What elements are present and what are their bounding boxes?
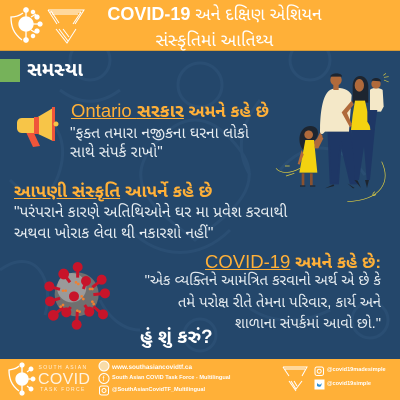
text: culture quote: "પરંપરાને કારણે અતિથિઓને ઘર મા પ્રવેશ કરવાથી <box>14 204 287 221</box>
footer logo <box>8 362 36 396</box>
icon: megaphone <box>17 107 58 147</box>
text: culture quote: અથવા ખોરાક લેવા થી નકારશો નહીં" <box>14 225 213 242</box>
heading: COVID-19: COVID-19 અમને કહે છે: <box>205 251 381 272</box>
footer triangle logo <box>282 366 308 392</box>
footer <box>0 359 400 400</box>
text: COVID quote: તમે પરોક્ષ રીતે તેમના પરિવાર, કાર્ય અને <box>178 294 381 310</box>
question: હું શું કરું? <box>140 327 213 348</box>
header banner <box>0 0 400 51</box>
text: COVID quote: "એક વ્યક્તિને આમંત્રિત કરવાનો અર્થ એ છે કે <box>145 273 381 289</box>
icon: coronavirus <box>44 262 110 330</box>
footer link icons: f <box>102 376 104 383</box>
man <box>328 128 357 183</box>
link: instagram: @SouthAsianCovidTF_Multilingual <box>112 387 205 393</box>
heading: Ontario: Ontario સરકાર અમને કહે છે <box>71 100 269 121</box>
text: Ontario quote: "ફક્ત તમારા નજીકના ઘરના લોકો <box>70 125 249 142</box>
text: Ontario quote: સાથે સંપર્ક રાખો" <box>70 144 163 161</box>
title: COVID-19 અને દક્ષિણ એશિયન <box>107 4 322 24</box>
family illustration <box>276 73 389 202</box>
footer organisation name: SOUTH ASIAN TASK FORCE <box>38 365 88 393</box>
text: COVID quote: શાળાના સંપર્કમાં આવો છો." <box>235 316 381 332</box>
title <box>107 4 322 50</box>
icon: shield logo <box>10 7 43 43</box>
text: Ontario quote <box>70 124 249 161</box>
girl <box>299 126 318 151</box>
handles <box>327 367 386 387</box>
footer social links <box>112 364 230 393</box>
section marker <box>0 59 20 82</box>
icon: triangle logo <box>48 10 85 44</box>
title: સંસ્કૃતિમાં આતિથ્ય <box>156 30 273 50</box>
handle: instagram: @covid19madesimple <box>327 367 386 373</box>
link: website: www.southasiancovidtf.ca <box>112 364 192 371</box>
handle: twitter: @covid19simple <box>327 381 371 387</box>
motion lines <box>276 166 300 176</box>
text: COVID quote <box>145 271 381 332</box>
child on arm <box>370 88 384 112</box>
heading: culture: આપણી સંસ્કૃતિ આપર્ને કહે છે <box>14 181 212 201</box>
link: facebook: South Asian COVID Task Force - Multilingual <box>112 375 230 381</box>
footer organisation name: COVID <box>38 371 90 388</box>
woman <box>352 128 375 180</box>
section heading: સમસ્યા <box>27 59 83 81</box>
text: culture quote <box>14 202 288 242</box>
